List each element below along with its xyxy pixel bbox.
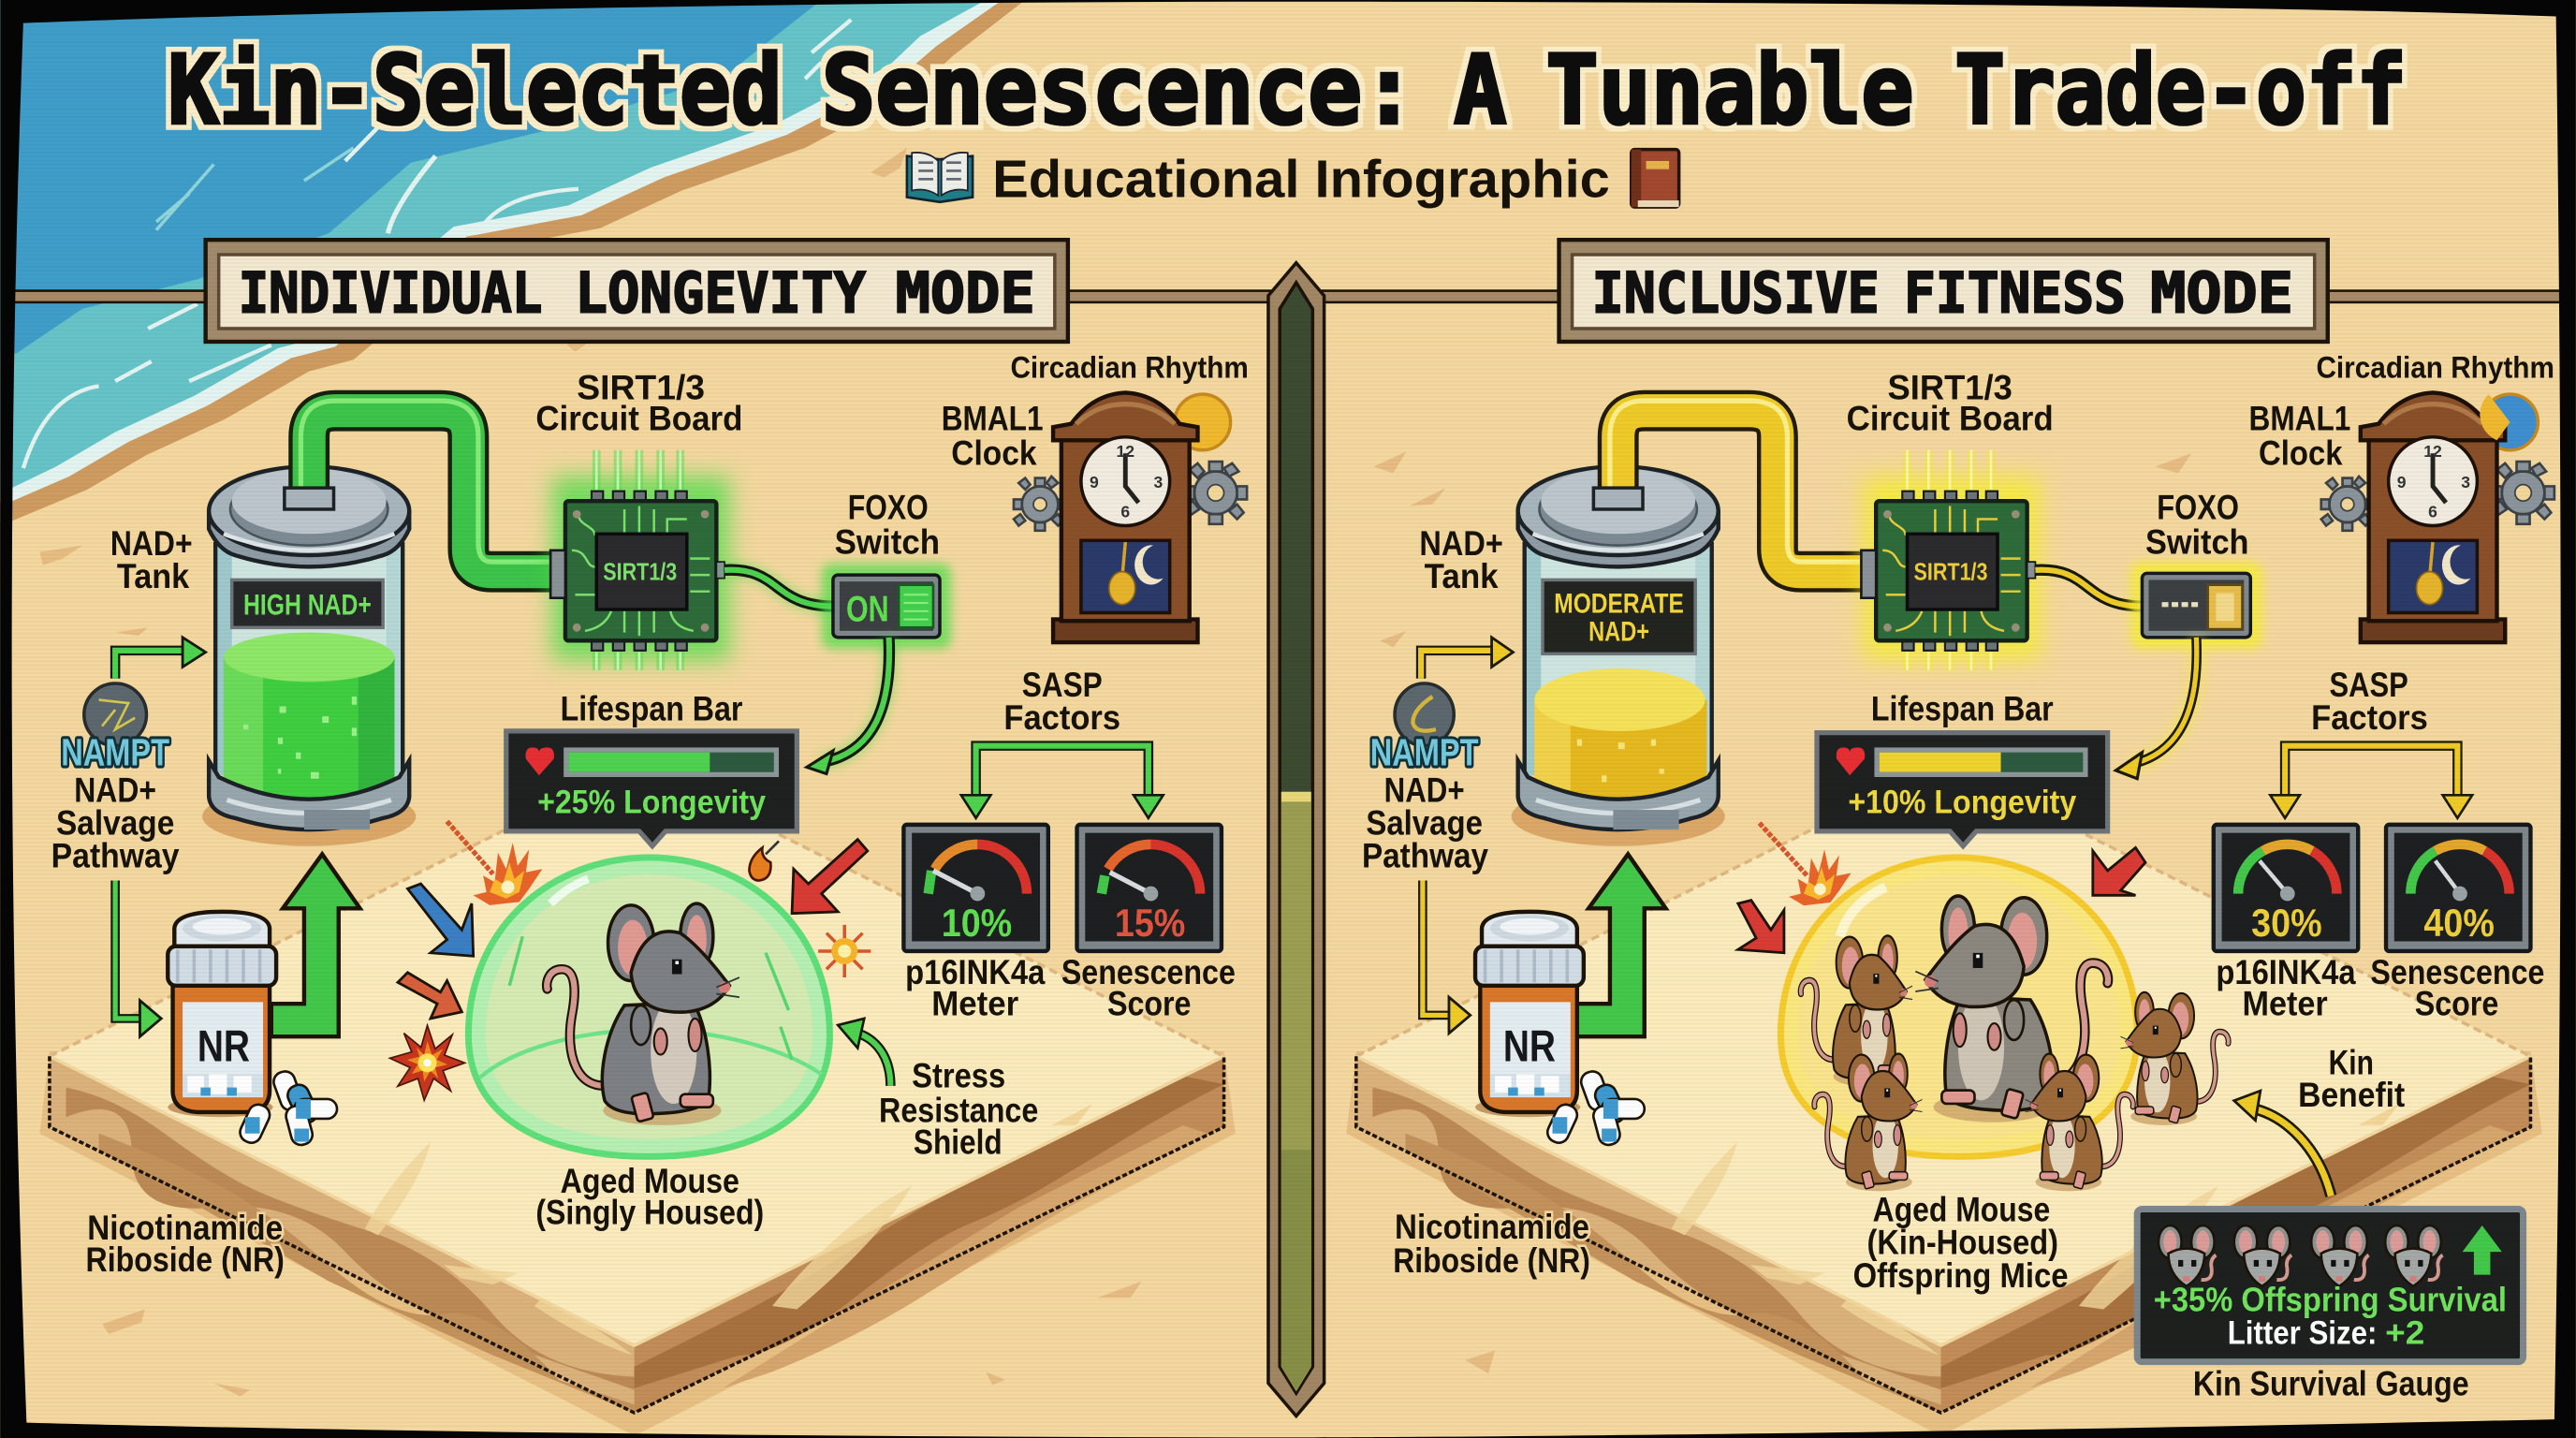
labels: left panel: Score [1107,984,1191,1022]
p16INK4a gauge [903,825,1048,951]
SIRT chip [1861,450,2041,670]
BMAL1 clock: 9 [2397,473,2407,492]
title: Kin-Selected [168,37,783,147]
title: Senescence: [822,37,1416,147]
NAD+ tank: HIGH NAD+ [243,587,372,621]
labels: left panel: Salvage [56,803,174,842]
labels: right panel: p16INK4a [2216,953,2356,991]
labels: left panel: FOXO [848,488,929,526]
labels: right panel: Salvage [1366,803,1483,842]
FOXO switch: partial [2130,562,2262,649]
labels: right panel: Switch [2145,522,2249,561]
NR bottle [1475,912,1584,1117]
labels: left panel: Circadian Rhythm [1010,351,1249,385]
platform: right [1346,764,2542,1436]
arrow: kin benefit [2234,1091,2331,1196]
labels: right panel: NAD+ [1419,524,1503,563]
NAD+ tank: NAD+ [1588,616,1649,647]
BMAL1 clock: 3 [1153,473,1163,492]
SIRT chip: SIRT1/3 [1914,557,1988,585]
labels: left panel: Shield [914,1123,1003,1162]
labels: left panel: Senescence [1061,953,1236,991]
labels: right panel: Meter [2242,984,2328,1022]
offspring mice [1801,935,2229,1191]
NAMPT enzyme: NAMPT [61,731,169,774]
labels: right panel: Kin Survival Gauge [2193,1365,2469,1403]
labels: left panel: Resistance [879,1091,1038,1129]
kin survival gauge: +35% Offspring Survival [2154,1280,2507,1318]
NR bottle: NR [198,1022,250,1072]
heading banner: individual longevity mode: LONGEVITY [575,261,866,326]
labels: right panel: Score [2415,984,2498,1022]
p16INK4a gauge [2214,825,2358,951]
BMAL1 clock: 6 [1120,503,1130,521]
arrow: NAMPT to tank [1421,638,1513,679]
arrow: to shield [838,1019,890,1086]
labels: left panel: Aged Mouse [561,1162,739,1200]
lifespan bar [1817,733,2108,846]
BMAL1 clock: 9 [1090,473,1099,492]
lifespan bar: +10% Longevity [1848,785,2077,821]
big green arrow: NR up [271,854,360,1036]
BMAL1 clock: 3 [2461,473,2470,492]
ocean and shoreline [0,0,1025,522]
title: Trade-off [1954,37,2407,147]
platform: left [39,764,1236,1436]
labels: left panel: NAD+ [110,524,193,563]
labels: left panel: Tank [117,557,190,595]
BMAL1 clock [2321,392,2554,642]
pipe: tank to chip [285,401,555,572]
labels: right panel: Aged Mouse [1873,1191,2050,1229]
labels: right panel: Kin [2329,1044,2374,1082]
heading banner: inclusive fitness mode: INCLUSIVE [1592,261,1880,326]
labels: right panel: (Kin-Housed) [1867,1224,2058,1262]
SIRT chip: SIRT1/3 [603,557,677,585]
subtitle: Educational Infographic [992,150,1610,209]
NAD+ tank: MODERATE [1554,589,1684,620]
labels: right panel: Nicotinamide [1395,1208,1589,1246]
senescence score gauge: 15% [1115,901,1185,945]
labels: left panel: Nicotinamide [87,1209,283,1247]
labels: left panel: Clock [951,434,1037,473]
center divider pillar [1268,263,1325,1416]
NAD+ tank [1512,466,1725,846]
icon: closed book [1632,150,1679,207]
stress arrows [398,840,868,1019]
stress burst icons [390,821,871,1100]
arrow: NAMPT to tank [115,638,206,679]
lifespan bar: +25% Longevity [537,785,766,821]
pills [237,1068,337,1147]
labels: left panel: Pathway [51,836,180,874]
labels: right panel: SIRT1/3 [1887,368,2012,406]
panel: individual longevity [51,351,1249,1279]
labels: right panel: Riboside (NR) [1393,1241,1590,1280]
senescence score gauge [1077,825,1222,951]
labels: left panel: Riboside (NR) [86,1240,285,1279]
labels: left panel: SIRT1/3 [577,368,705,406]
labels: left panel [51,351,1249,1279]
labels: right panel: Senescence [2370,953,2544,991]
labels: right panel: Lifespan Bar [1871,689,2054,727]
heading banner: inclusive fitness mode: FITNESS [1904,261,2126,326]
labels: right panel [1362,351,2554,1403]
title: Tunable [1545,37,1914,147]
senescence score gauge: 40% [2423,901,2495,945]
NAMPT enzyme [61,683,169,774]
labels: right panel: Tank [1425,557,1499,595]
heading banner: inclusive fitness mode [1559,240,2328,342]
arrow: FOXO to lifespan [807,638,889,773]
kin survival gauge: +2 [2385,1314,2424,1351]
heading banner: individual longevity mode: MODE [896,261,1035,326]
aged mouse: singly housed [547,903,739,1125]
lifespan bar [506,731,797,846]
p16INK4a gauge: 10% [942,901,1012,945]
aged mouse: kin-housed [1915,896,2108,1123]
title [168,37,2407,147]
labels: right panel: NAD+ [1384,770,1465,809]
arrow: salvage to bottle [1423,881,1471,1034]
FOXO wire [2035,570,2142,606]
labels: right panel: FOXO [2157,488,2239,526]
labels: left panel: Circuit Board [535,400,742,438]
labels: left panel: (Singly Housed) [535,1193,764,1231]
heading banner: inclusive fitness mode: MODE [2150,261,2293,326]
heading banner: individual longevity mode: INDIVIDUAL [239,261,542,326]
labels: right panel: Benefit [2298,1076,2405,1114]
labels: right panel: Offspring Mice [1853,1256,2068,1295]
labels: left panel: NAD+ [74,770,156,809]
labels: left panel: SASP [1022,666,1103,704]
icon: open book [907,153,973,202]
NR bottle: NR [1503,1022,1556,1072]
labels: right panel: Circuit Board [1847,400,2054,438]
BMAL1 clock: 12 [2423,442,2442,461]
NAMPT enzyme: NAMPT [1370,731,1479,774]
labels: left panel: Factors [1003,698,1120,737]
heading banner: individual longevity mode [206,240,1068,342]
labels: right panel: Pathway [1362,836,1489,874]
labels: right panel: Clock [2259,434,2343,473]
labels: left panel: Switch [835,522,940,561]
title: A [1454,37,1506,147]
panel: inclusive fitness [1362,351,2554,1403]
FOXO switch: on: ON [846,589,889,629]
stress resistance shield dome [468,858,829,1156]
SIRT chip [550,450,729,670]
labels: right panel: SASP [2329,666,2408,704]
SASP bracket arrows [961,746,1164,818]
NAMPT enzyme [1370,683,1479,774]
FOXO switch: on [822,564,951,649]
stress burst and arrows [1738,823,2145,953]
arrow: salvage to bottle [115,881,161,1036]
kin survival gauge [2137,1209,2524,1362]
pills [1544,1068,1645,1147]
arrow: FOXO to lifespan [2115,638,2197,779]
NAD+ tank [202,466,416,846]
kin survival gauge: Litter Size: [2228,1314,2377,1351]
senescence score gauge [2386,825,2530,951]
BMAL1 clock: 6 [2428,503,2437,521]
NR bottle [168,912,276,1117]
BMAL1 clock: 12 [1117,442,1134,461]
FOXO wire [724,570,833,606]
big green arrow: NR up [1577,854,1666,1036]
SASP bracket arrows [2270,746,2472,818]
labels: right panel: Circadian Rhythm [2316,351,2554,385]
labels: left panel: Meter [931,984,1018,1022]
horizontal divider rails [10,291,2568,302]
labels: left panel: p16INK4a [905,953,1046,991]
sand scuff marks [39,148,2191,1397]
labels: right panel: Factors [2311,698,2428,737]
BMAL1 clock [1014,392,1247,642]
labels: left panel: Lifespan Bar [561,689,742,727]
p16INK4a gauge: 30% [2251,901,2322,945]
labels: left panel: BMAL1 [942,400,1044,438]
pipe: tank to chip [1593,401,1865,572]
kin shield dome [1780,858,2137,1156]
labels: left panel: Stress [912,1057,1005,1095]
labels: right panel: BMAL1 [2249,400,2350,438]
